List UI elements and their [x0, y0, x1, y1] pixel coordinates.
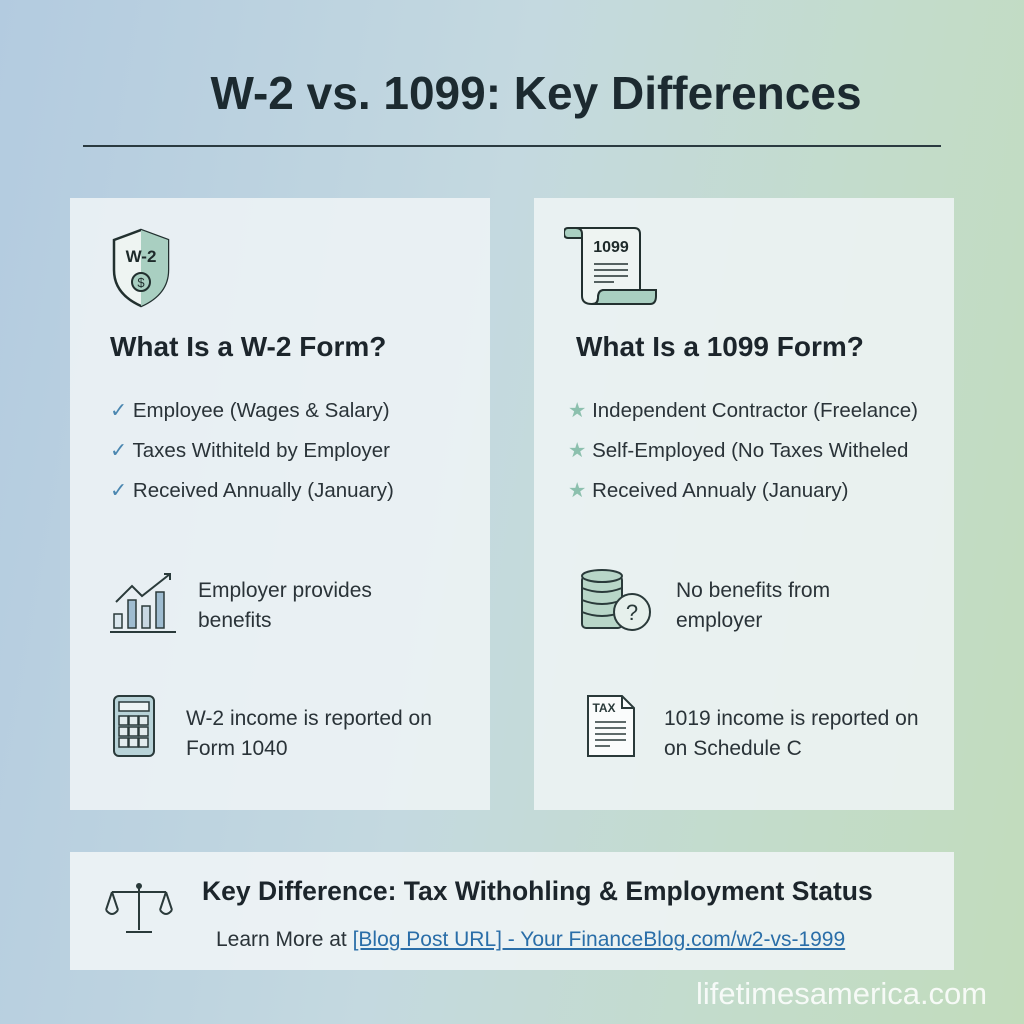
title: W-2 vs. 1099: Key Differences	[210, 67, 862, 119]
icon: tax doc: TAX	[592, 701, 616, 715]
icon: shield	[112, 228, 170, 308]
text: no benefits	[676, 579, 830, 632]
list	[110, 399, 394, 502]
panel: W-2: ✓ Taxes Withiteld by Employer	[110, 439, 390, 462]
icon: coins	[581, 569, 651, 631]
panel: 1099	[534, 198, 954, 810]
text: benefits: Employer provides	[198, 579, 372, 602]
text: schedule c: on Schedule C	[664, 737, 802, 760]
text: schedule c: 1019 income is reported on	[664, 707, 918, 730]
watermark: lifetimesamerica.com	[696, 976, 987, 1011]
icon: scroll: 1099	[593, 239, 629, 256]
icon: coins: ?	[626, 600, 638, 625]
text: benefits	[198, 579, 372, 632]
panel: W-2	[70, 198, 490, 810]
text: no benefits: No benefits from	[676, 579, 830, 602]
panel: W-2: ✓ Received Annually (January)	[110, 479, 394, 502]
icon: chart	[110, 573, 176, 633]
text: schedule c	[664, 707, 918, 760]
icon: tax doc	[587, 695, 635, 757]
text: form 1040: Form 1040	[186, 737, 288, 760]
icon: shield: W-2	[126, 247, 156, 266]
text: no benefits: employer	[676, 609, 762, 632]
heading: What Is a W-2 Form?	[110, 331, 386, 362]
panel: 1099: ★ Received Annualy (January)	[568, 479, 848, 502]
text: form 1040: W-2 income is reported on	[186, 707, 432, 730]
text: benefits: benefits	[198, 609, 272, 632]
icon: scroll	[564, 227, 657, 305]
heading: What Is a 1099 Form?	[576, 331, 864, 362]
panel: 1099: ★ Self-Employed (No Taxes Witheled	[568, 439, 908, 462]
icon: scale	[105, 883, 173, 933]
icon: shield: $	[137, 275, 145, 290]
panel: 1099: ★ Independent Contractor (Freelance)	[568, 399, 918, 422]
heading: Key Difference: Tax Withohling & Employment Status	[202, 876, 873, 906]
icon: calculator	[113, 695, 155, 757]
link text: Learn More at [Blog Post URL] - Your FinanceBlog.com/w2-vs-1999	[216, 928, 845, 951]
panel: W-2: ✓ Employee (Wages & Salary)	[110, 399, 390, 422]
list	[568, 399, 918, 502]
text: form 1040	[186, 707, 432, 760]
banner: key difference	[70, 852, 954, 970]
